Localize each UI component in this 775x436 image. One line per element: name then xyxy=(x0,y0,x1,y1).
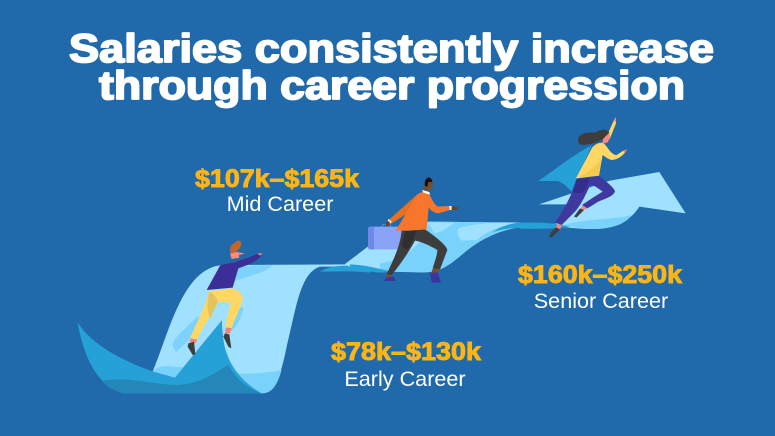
shoes xyxy=(556,206,587,229)
label: senior career xyxy=(518,261,682,313)
label: senior career: Senior Career xyxy=(534,288,668,313)
ribbon: middle section under mid career figure xyxy=(345,222,520,273)
cape xyxy=(538,145,592,192)
label: early career: $78k–$130k xyxy=(331,338,481,366)
title xyxy=(69,27,714,108)
torso and arm xyxy=(207,253,262,290)
figure: senior career flyer with cape xyxy=(538,117,627,238)
raised arm xyxy=(607,117,616,138)
ribbon: early career section xyxy=(77,264,370,393)
label: early career: Early Career xyxy=(344,366,466,391)
label: early career xyxy=(331,338,481,391)
torso and arm xyxy=(576,143,625,178)
label: mid career: $107k–$165k xyxy=(195,165,359,193)
figure: mid career walker with briefcase xyxy=(368,177,459,283)
legs xyxy=(190,288,243,339)
title: through career progression xyxy=(99,64,685,108)
label: senior career: $160k–$250k xyxy=(518,261,682,289)
back arm xyxy=(389,195,417,223)
ribbon: arrow rising to senior career xyxy=(520,172,686,229)
legs xyxy=(555,176,615,225)
shoes xyxy=(384,272,441,283)
torso and front arm xyxy=(396,192,450,231)
label: mid career xyxy=(195,165,359,216)
head xyxy=(423,180,433,192)
label: mid career: Mid Career xyxy=(227,191,333,216)
legs xyxy=(387,229,447,275)
title: Salaries consistently increase xyxy=(69,27,714,71)
figure: early career climber xyxy=(188,241,262,355)
head xyxy=(603,132,610,143)
shoes xyxy=(189,327,232,343)
head xyxy=(230,252,239,259)
briefcase xyxy=(368,227,402,249)
